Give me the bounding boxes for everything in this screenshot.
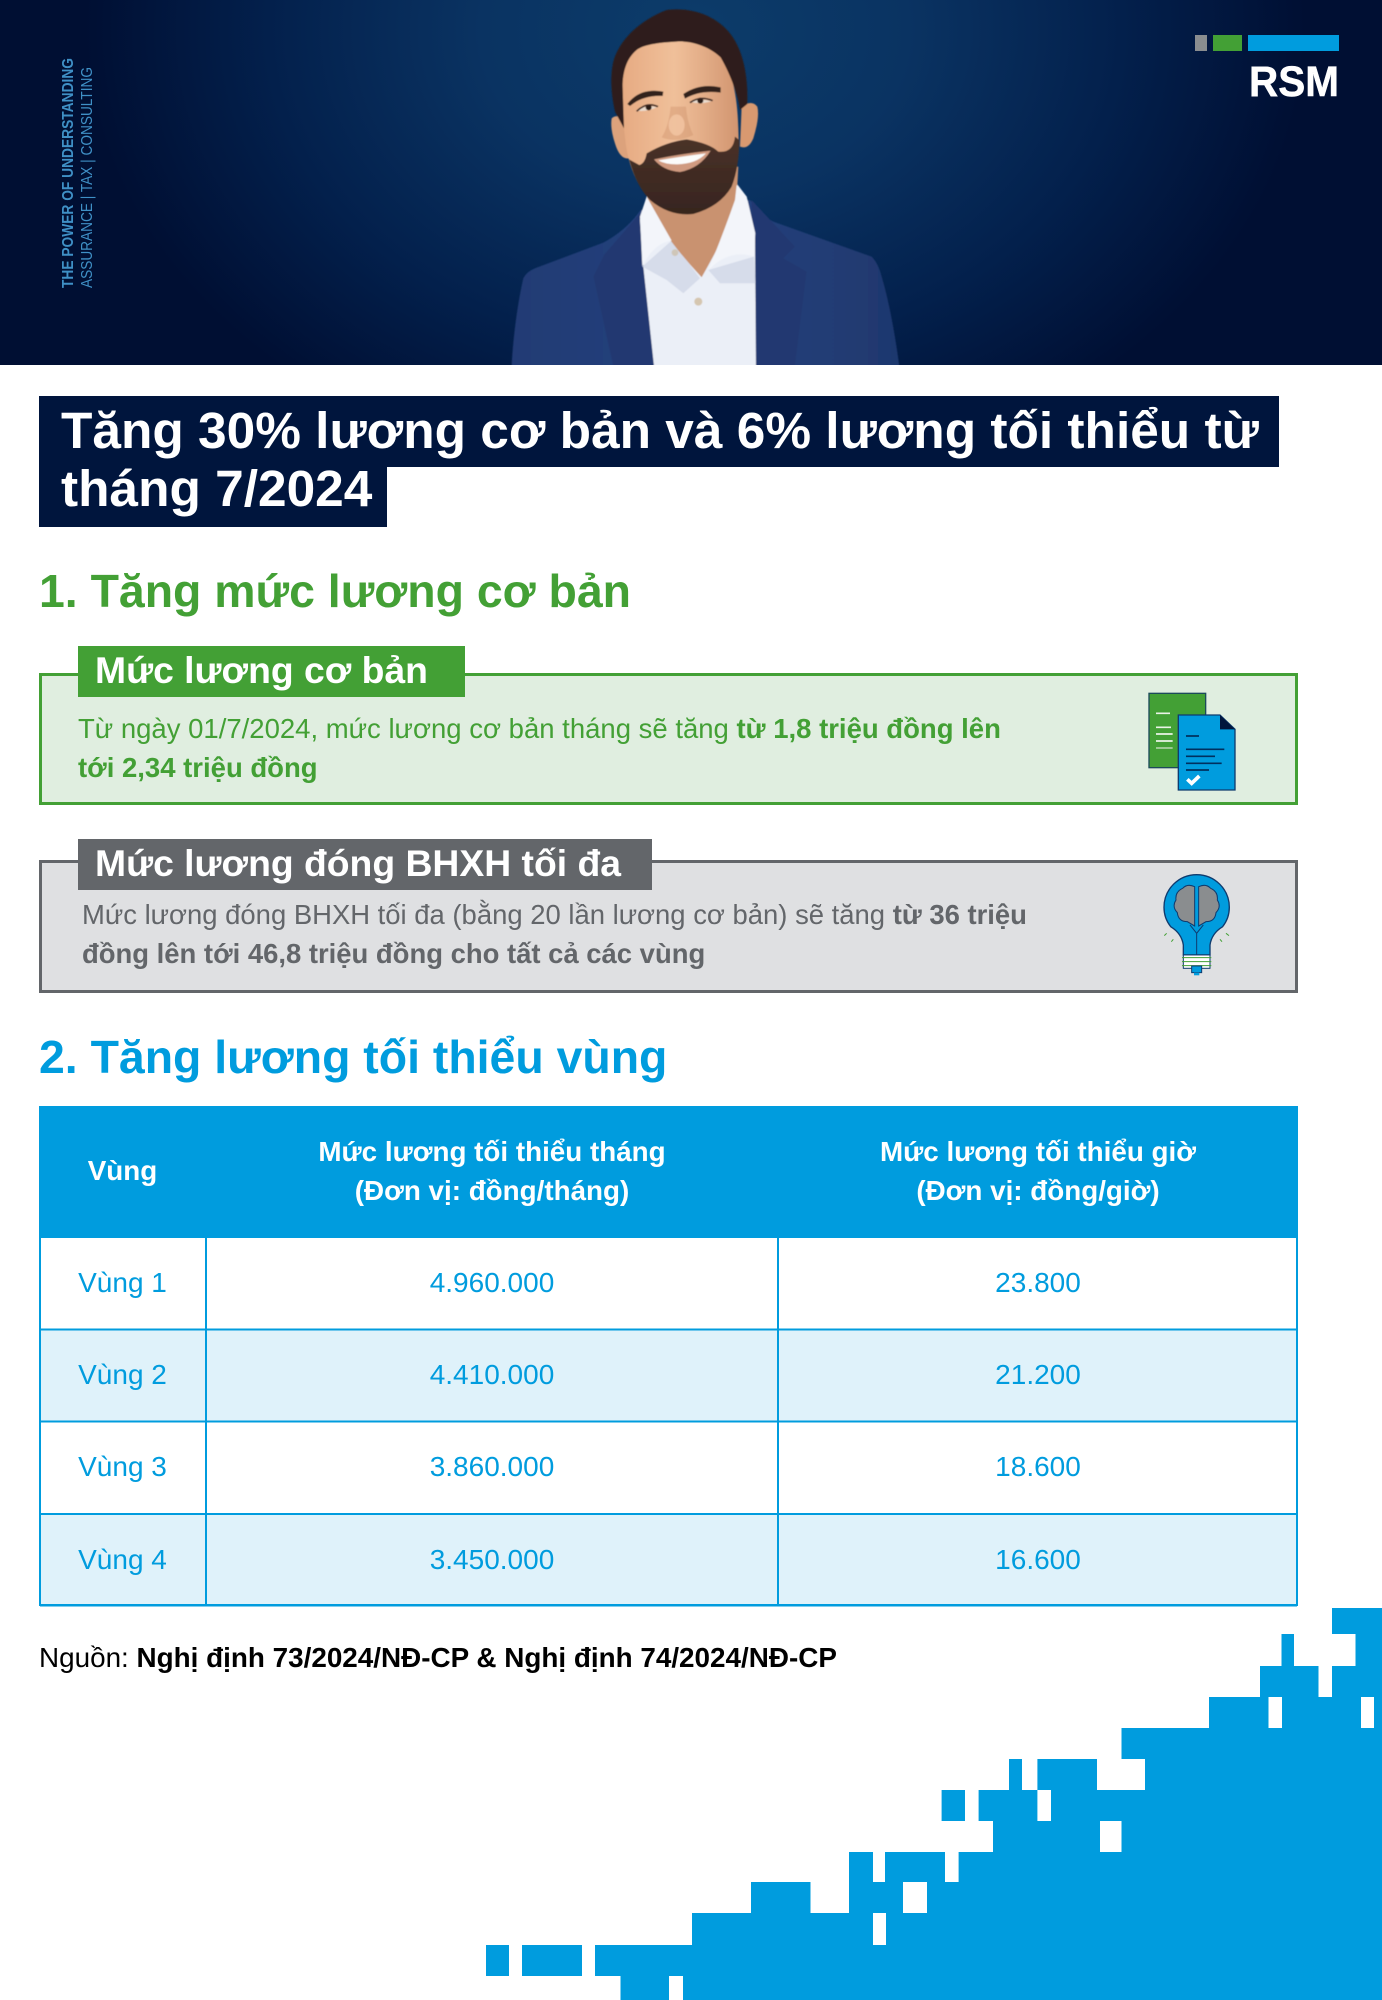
table rows: 4.410.000	[430, 1359, 554, 1390]
table header: (Đơn vị: đồng/giờ)	[916, 1175, 1160, 1206]
table rows	[78, 1267, 1081, 1575]
table rows: 18.600	[995, 1451, 1081, 1482]
tag: basic salary: Mức lương cơ bản	[95, 649, 428, 691]
tag: maximum social insurance: Mức lương đóng BHXH tối đa	[95, 842, 621, 884]
table rows: 21.200	[995, 1359, 1081, 1390]
header banner	[0, 0, 1382, 366]
tagline vertical text: ASSURANCE | TAX | CONSULTING	[79, 67, 96, 288]
tagline vertical text: THE POWER OF UNDERSTANDING	[60, 58, 77, 288]
table header: Mức lương tối thiểu tháng	[318, 1136, 666, 1167]
title block: tháng 7/2024	[61, 459, 373, 517]
heading: section 1: 1. Tăng mức lương cơ bản	[39, 565, 631, 617]
table rows: Vùng 3	[78, 1451, 167, 1482]
minimum wage table	[39, 1106, 1298, 1606]
table header	[39, 1106, 1298, 1238]
table header: Mức lương tối thiểu giờ	[880, 1136, 1196, 1167]
title block: Tăng 30% lương cơ bản và 6% lương tối thiểu từ	[61, 401, 1260, 459]
source note: Nguồn: Nghị định 73/2024/NĐ-CP & Nghị định 74/2024/NĐ-CP	[39, 1642, 837, 1673]
text: basic salary description: Từ ngày 01/7/2024, mức lương cơ bản tháng sẽ tăng từ 1,8 triệu đồng lên	[78, 713, 1001, 744]
RSM logo: RSM	[1249, 58, 1339, 106]
decorative pixel staircase	[486, 1608, 1382, 2000]
table rows: Vùng 1	[78, 1267, 167, 1298]
table rows: 23.800	[995, 1267, 1081, 1298]
table rows: 3.860.000	[430, 1451, 554, 1482]
panel: basic salary	[40, 646, 1296, 804]
table rows: 3.450.000	[430, 1544, 554, 1575]
title block	[39, 396, 1279, 527]
text: maximum social insurance description: đồng lên tới 46,8 triệu đồng cho tất cả các vùng	[82, 938, 705, 969]
text: basic salary description: tới 2,34 triệu đồng	[78, 752, 318, 783]
table rows: Vùng 4	[78, 1544, 167, 1575]
table rows: Vùng 2	[78, 1359, 167, 1390]
text: maximum social insurance description: Mức lương đóng BHXH tối đa (bằng 20 lần lương cơ bản) sẽ tăng từ 36 triệu	[82, 899, 1027, 930]
RSM logo	[1195, 35, 1339, 97]
table rows: 16.600	[995, 1544, 1081, 1575]
table rows: 4.960.000	[430, 1267, 554, 1298]
heading: section 2: 2. Tăng lương tối thiểu vùng	[39, 1031, 667, 1083]
text: maximum social insurance description	[82, 899, 1027, 969]
portrait of smiling man in navy suit	[512, 9, 899, 366]
table header: (Đơn vị: đồng/tháng)	[355, 1175, 629, 1206]
panel: maximum social insurance salary	[40, 839, 1296, 992]
icon: documents	[1149, 693, 1235, 790]
text: basic salary description	[78, 713, 1001, 783]
icon: light bulb with brain	[1164, 875, 1229, 975]
table header: Vùng	[88, 1155, 157, 1186]
tagline vertical text	[60, 58, 96, 288]
